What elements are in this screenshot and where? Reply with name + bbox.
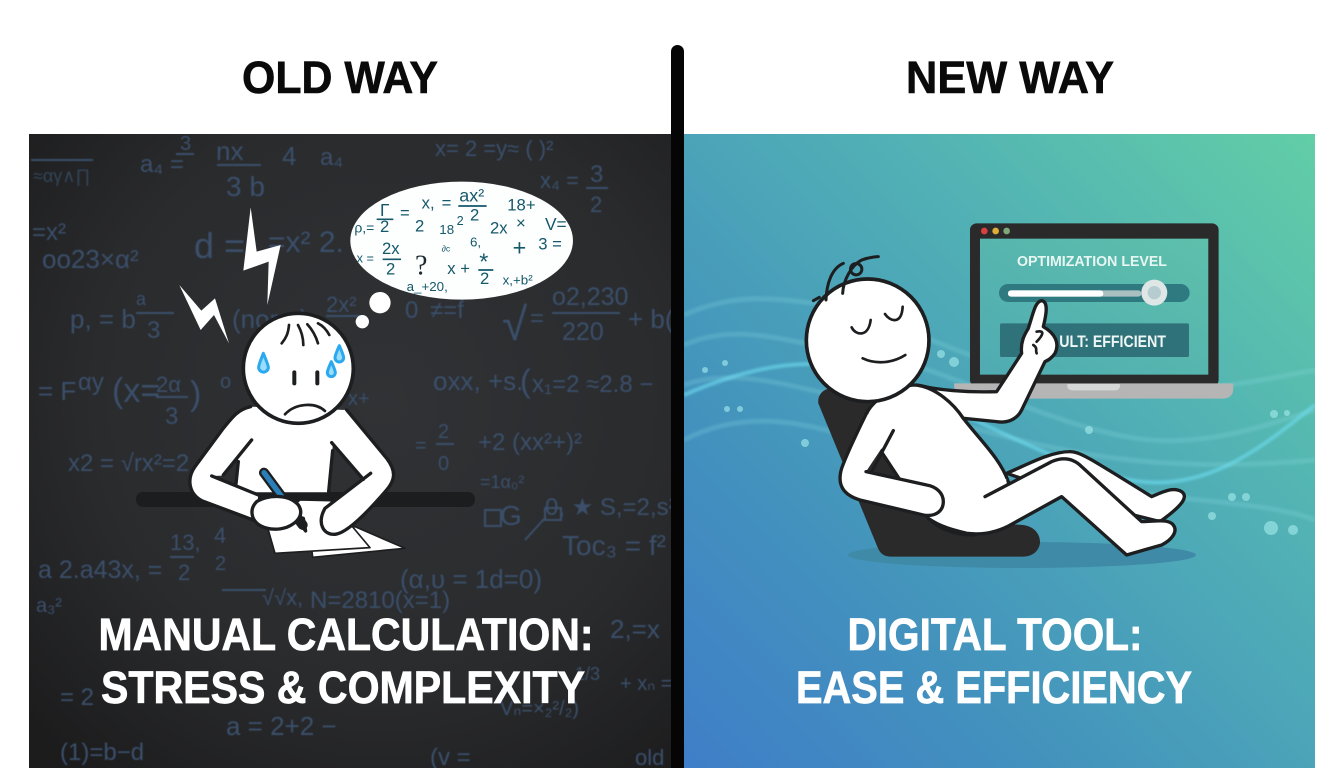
chair — [818, 388, 1040, 557]
paper sheets — [267, 500, 405, 557]
thought bubble with equations: + — [513, 234, 526, 260]
chalkboard math background: o2,230 — [552, 283, 628, 311]
chalkboard math background: =x² — [32, 219, 66, 246]
chalkboard math background: Vₙ=×₂²/₂) — [500, 698, 579, 720]
chalkboard math background: G — [500, 500, 522, 531]
thought bubble with equations — [350, 182, 573, 328]
head — [243, 313, 353, 423]
sweat drops — [259, 346, 344, 377]
chalkboard math background: x₄ = — [540, 168, 579, 193]
thought bubble with equations: ∂c — [442, 244, 451, 254]
writing hand — [252, 496, 301, 529]
chalkboard math background: 4 — [282, 141, 296, 171]
chalkboard math background: 2 — [178, 560, 190, 585]
thought bubble with equations: x = — [357, 252, 374, 266]
thought bubble with equations: x + — [447, 259, 470, 278]
chalkboard math background — [31, 133, 677, 768]
chalkboard math background: 2,=x — [610, 614, 660, 644]
chalkboard math background: 3 — [180, 133, 191, 155]
chalkboard math background: ≈αγ∧∏ — [33, 166, 90, 186]
thought bubble with equations: 2 — [415, 217, 424, 236]
chalkboard math background: a₃² — [36, 595, 62, 617]
chalkboard math background: 3 b — [226, 171, 265, 202]
chalkboard math background: 4 — [214, 523, 226, 548]
thought bubble with equations: x, — [422, 193, 435, 212]
caption: digital tool: EASE & EFFICIENCY — [796, 662, 1192, 713]
caption: manual calculation: STRESS & COMPLEXITY — [101, 662, 585, 713]
chalkboard math background: a 2.a43x, = — [38, 556, 162, 584]
chalkboard math background: = 2 — [60, 684, 94, 711]
thought bubble with equations: ? — [415, 251, 427, 282]
chalkboard math background: d = — [194, 225, 245, 266]
chalkboard math background: ≠=f — [430, 297, 464, 324]
right arm — [321, 410, 394, 534]
chalkboard math background: nx — [216, 136, 243, 166]
icon: stress lightning bolts — [179, 207, 281, 343]
thought bubble with equations: ax² — [459, 185, 484, 205]
thought bubble with equations: ρ,= — [354, 220, 374, 236]
thought bubble with equations: 2 — [480, 269, 489, 288]
relaxed stick figure reclining in chair — [806, 257, 1184, 557]
chalkboard math background: a — [136, 289, 147, 309]
chalkboard math background: a₄ — [320, 144, 343, 171]
chalkboard math background: 2x² — [326, 292, 357, 317]
caption: manual calculation — [98, 609, 594, 713]
chalkboard math background: + xₙ = — [620, 673, 672, 695]
head — [806, 279, 929, 402]
chalkboard math background: =x² 2. — [268, 226, 344, 259]
chalkboard math background: (α,υ = 1d=0) — [400, 564, 542, 594]
resting arm — [840, 413, 943, 515]
chalkboard math background: √√x, — [262, 585, 303, 610]
chalkboard math background: Toc₃ = f² — [562, 530, 666, 561]
panel: old way chalkboard — [29, 133, 677, 768]
chalkboard math background: ( — [520, 363, 531, 399]
chalkboard math background: 3 — [590, 161, 603, 188]
pen — [264, 473, 303, 525]
thought bubble with equations: 18+ — [507, 196, 536, 215]
thought bubble with equations: 2x — [382, 239, 400, 258]
caption: digital tool: DIGITAL TOOL: — [848, 609, 1142, 660]
caption: manual calculation: MANUAL CALCULATION: — [98, 609, 594, 660]
chalkboard math background: = — [415, 435, 427, 457]
center divider — [671, 45, 684, 768]
chalkboard math background: x₁=2 ≈2.8 − — [532, 371, 653, 398]
title: new way: NEW WAY — [906, 52, 1114, 103]
laptop with optimization UI: ULT: EFFICIENT — [1059, 332, 1166, 351]
torso and pointing arm — [867, 385, 1010, 535]
chalkboard math background: oxx, +s. — [433, 366, 523, 396]
chalkboard math background: x= 2 =y≈ ( )² — [435, 136, 553, 161]
chalkboard math background: 2 — [590, 192, 602, 217]
panel: new way gradient — [684, 134, 1315, 768]
chalkboard math background: 2α — [156, 372, 181, 397]
thought bubble with equations: 6, — [470, 235, 481, 250]
laptop with optimization UI — [954, 223, 1233, 399]
thought bubble with equations: * — [479, 248, 488, 274]
chalkboard math background: a₄ = — [140, 151, 184, 178]
chalkboard math background: (x= — [112, 372, 160, 410]
chalkboard math background: 2 — [215, 553, 226, 575]
chalkboard math background: oo23×α² — [42, 244, 139, 274]
chalkboard math background: 0 — [405, 297, 418, 324]
chalkboard math background: x2 = √rx²=2 — [68, 450, 189, 477]
chalkboard math background: x+ — [348, 388, 370, 410]
thought bubble with equations: V= — [545, 214, 567, 234]
chalkboard math background: 2 — [438, 421, 449, 443]
thought bubble with equations: Γ — [380, 200, 390, 220]
thought bubble with equations: 3 = — [538, 234, 562, 253]
chalkboard math background: √ — [502, 298, 528, 350]
chalkboard math background: 220 — [562, 318, 604, 346]
chalkboard math background: a = 2+2 − — [226, 711, 337, 741]
thought bubble with equations: 2x — [490, 218, 508, 237]
thought bubble with equations: 18 — [439, 222, 454, 237]
chalkboard math background: + b( — [628, 304, 674, 334]
thought bubble with equations: = — [400, 203, 410, 222]
thought bubble with equations: a_+20, — [407, 279, 448, 294]
far leg — [1007, 452, 1184, 522]
near leg — [928, 443, 1175, 555]
chalkboard math background: =1α₀² — [480, 472, 524, 492]
thought bubble with equations: 2 — [386, 260, 395, 279]
chalkboard math background: 1/3 — [575, 664, 600, 684]
chalkboard math background: (1)=b−d — [60, 739, 144, 766]
chalkboard math background: N=2810(x=1) — [310, 587, 450, 614]
chalkboard math background: ) — [190, 375, 201, 413]
floor shadow — [848, 542, 1196, 568]
chalkboard math background: = — [530, 305, 544, 332]
caption: digital tool — [796, 609, 1192, 713]
chalkboard math background: 0, ★ S,=2,s² — [545, 494, 677, 521]
thought bubble with equations: x,+b² — [503, 273, 533, 288]
chalkboard math background: 3 — [147, 317, 160, 344]
desk bar — [136, 492, 475, 507]
chalkboard math background: o — [220, 371, 231, 393]
thought bubble with equations: 2 — [380, 217, 389, 236]
chalkboard math background: 0 — [438, 453, 449, 475]
title: old way: OLD WAY — [242, 52, 438, 103]
chalkboard math background: = F — [38, 376, 76, 406]
chalkboard math background: p, = b — [70, 304, 136, 334]
stressed stick figure writing — [190, 313, 405, 557]
chalkboard math background: 13, — [170, 530, 201, 555]
chalkboard math background: (norm) — [232, 304, 309, 334]
chalkboard math background: +2 (xx²+)² — [478, 429, 582, 456]
thought bubble with equations: × — [516, 213, 526, 232]
torso — [227, 407, 360, 492]
thought bubble with equations: 2 — [457, 214, 464, 228]
laptop with optimization UI: OPTIMIZATION LEVEL — [1017, 254, 1167, 270]
chalkboard math background: αy — [78, 369, 104, 396]
thought bubble with equations: 2 — [470, 206, 479, 225]
left arm — [190, 407, 258, 521]
flowing wave lines and dots — [684, 299, 1315, 535]
chalkboard math background: 3 — [165, 403, 178, 430]
thought bubble with equations: = — [442, 193, 451, 212]
